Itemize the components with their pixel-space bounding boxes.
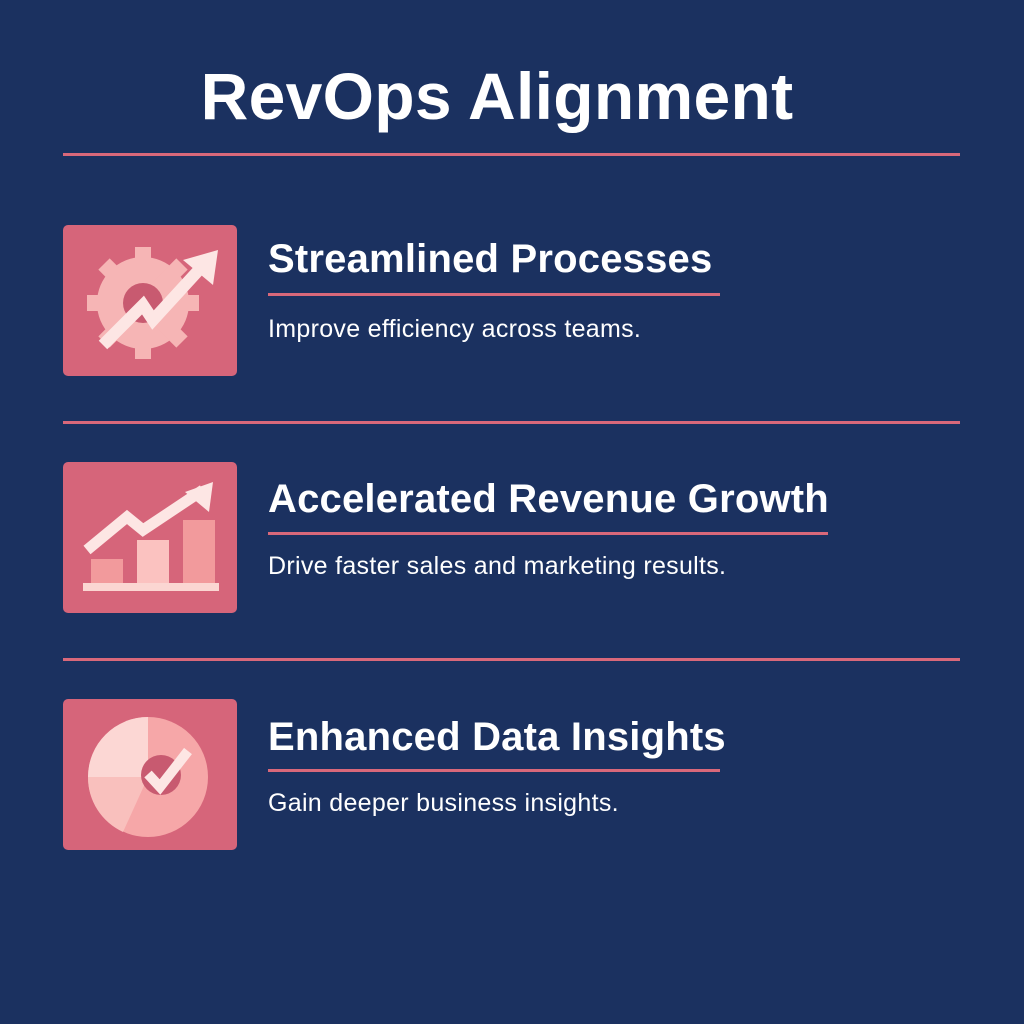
heading: Enhanced Data Insights bbox=[268, 715, 726, 759]
icon: pie chart with check bbox=[63, 699, 237, 850]
heading: Streamlined Processes bbox=[268, 237, 712, 281]
description: Gain deeper business insights. bbox=[268, 789, 619, 817]
panel: enhanced data insights bbox=[63, 699, 726, 850]
title: RevOps Alignment bbox=[201, 59, 793, 133]
icon: gear with arrow bbox=[63, 225, 237, 376]
heading: Accelerated Revenue Growth bbox=[268, 477, 829, 521]
panel: accelerated revenue growth bbox=[63, 462, 829, 613]
description: Improve efficiency across teams. bbox=[268, 315, 641, 343]
description: Drive faster sales and marketing results. bbox=[268, 552, 726, 580]
panel: streamlined processes bbox=[63, 225, 720, 376]
icon: bar chart with arrow bbox=[63, 462, 237, 613]
